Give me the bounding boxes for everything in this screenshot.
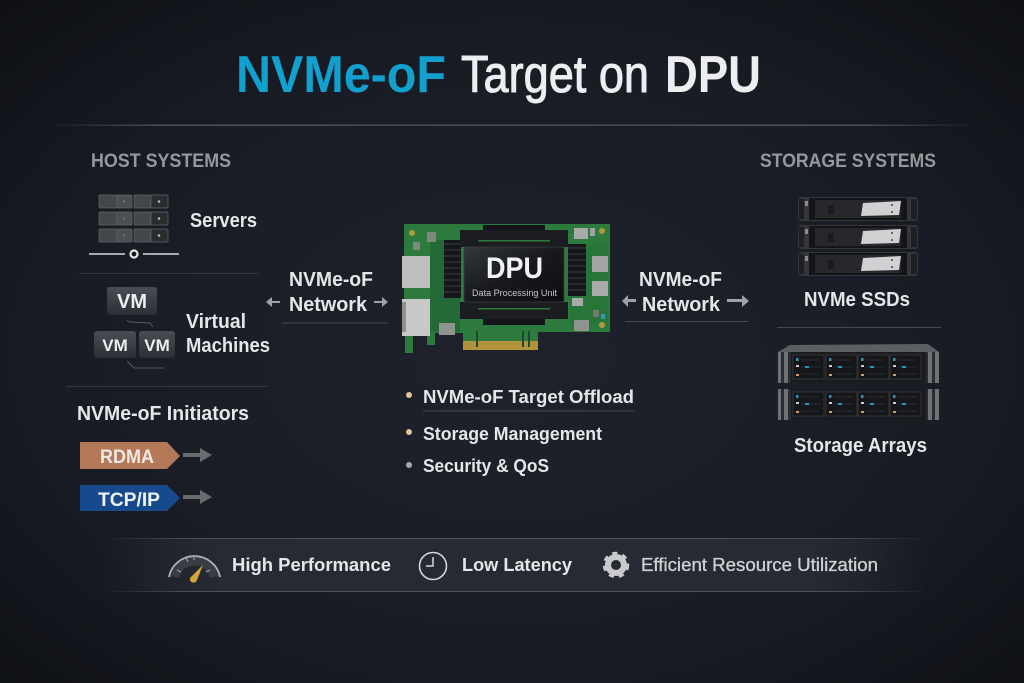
label: storage arrays: Storage Arrays — [794, 435, 927, 457]
tag: RDMA — [80, 442, 212, 469]
icon: servers — [89, 195, 179, 258]
tag: TCP/IP — [80, 485, 212, 511]
benefit: high performance: High Performance — [232, 555, 391, 575]
panel: storage systems — [760, 151, 941, 457]
label: NVMe SSDs: NVMe SSDs — [804, 289, 910, 311]
panel: host systems — [66, 151, 270, 511]
icon: virtual machines: VM — [117, 291, 147, 313]
icon: virtual machines — [94, 287, 175, 368]
icon: storage arrays — [778, 344, 939, 420]
chip with DPU label: DPU — [486, 252, 543, 285]
icon: NVMe SSDs — [798, 197, 918, 276]
title: Target on — [461, 46, 649, 104]
benefits bar — [100, 538, 930, 592]
left network label — [266, 269, 388, 324]
title — [236, 46, 761, 104]
icon: gear — [604, 554, 628, 576]
tag: RDMA: RDMA — [100, 447, 154, 468]
title: NVMe-oF — [236, 46, 446, 104]
tag: TCP/IP: TCP/IP — [98, 490, 160, 511]
left network label: Network — [289, 294, 368, 316]
heading: storage systems: STORAGE SYSTEMS — [760, 151, 936, 172]
icon: clock — [420, 552, 446, 580]
feature list — [406, 387, 634, 476]
chip with DPU label — [464, 247, 564, 302]
right network label: NVMe-oF — [639, 269, 722, 291]
right network label: Network — [642, 294, 721, 316]
title: DPU — [665, 46, 761, 104]
board — [404, 224, 610, 353]
label: virtual machines: Virtual — [186, 311, 246, 333]
heading: initiators: NVMe-oF Initiators — [77, 403, 249, 425]
heatsink — [444, 240, 461, 298]
benefit: low latency: Low Latency — [462, 555, 572, 575]
icon: gauge — [169, 555, 220, 583]
benefit: efficient resource utilization: Efficient Resource Utilization — [641, 555, 878, 575]
icon: virtual machines: VM — [144, 336, 170, 355]
label: virtual machines: Machines — [186, 335, 270, 357]
label: virtual machines — [186, 311, 270, 357]
icon: virtual machines: VM — [102, 336, 128, 355]
small components — [409, 230, 415, 236]
heading: host systems: HOST SYSTEMS — [91, 151, 231, 172]
right network label — [622, 269, 749, 322]
gold connector — [463, 341, 538, 350]
feature list: Security & QoS — [423, 456, 549, 476]
panel: DPU card — [402, 224, 610, 353]
label: servers: Servers — [190, 210, 257, 232]
network ports — [402, 256, 430, 288]
chip with DPU label: Data Processing Unit — [472, 288, 557, 299]
left network label: NVMe-oF — [289, 269, 373, 291]
feature list: NVMe-oF Target Offload — [423, 387, 634, 407]
feature list: Storage Management — [423, 424, 602, 444]
